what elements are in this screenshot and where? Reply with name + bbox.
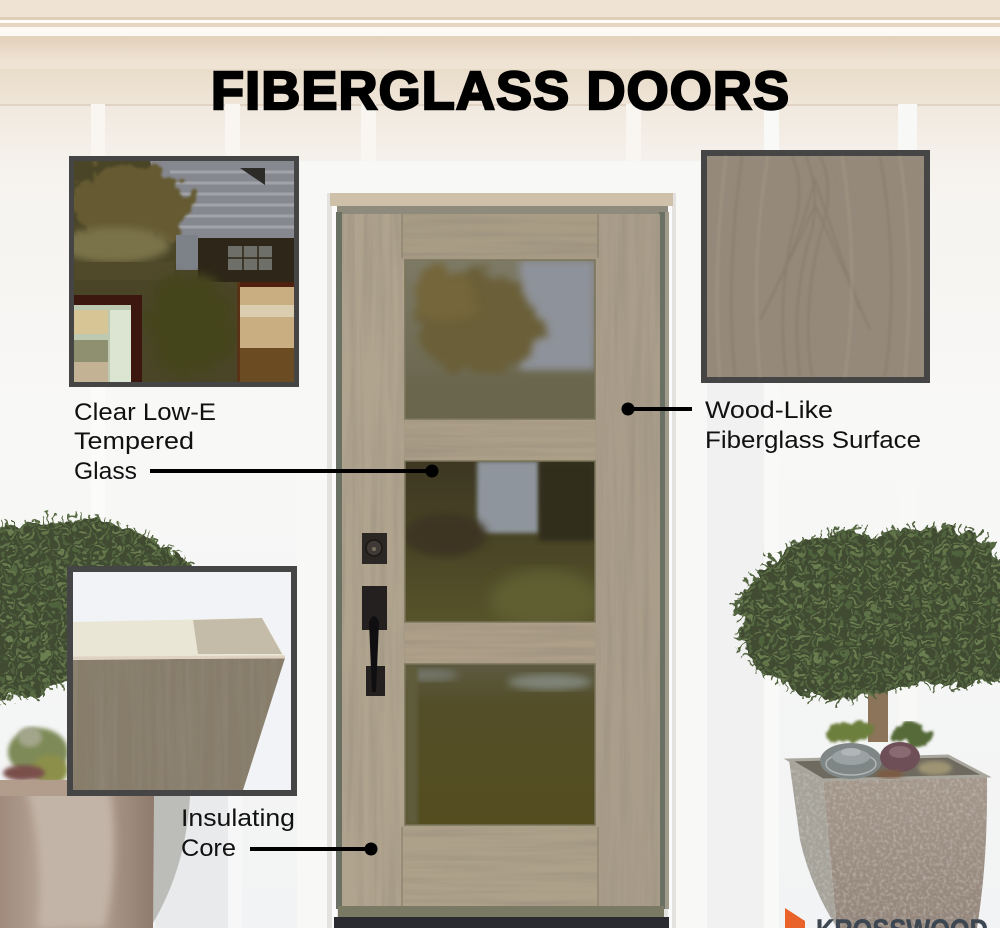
callout: insulating core: Insulating — [181, 805, 295, 832]
trunk — [868, 690, 888, 742]
left planter — [0, 780, 190, 928]
reflected roof — [150, 161, 294, 238]
inset: wood-like surface swatch — [701, 150, 930, 383]
window left — [74, 295, 142, 382]
callout: clear low-e tempered glass: Clear Low-E — [74, 399, 216, 426]
threshold — [334, 906, 669, 928]
callout: clear low-e tempered glass: Glass — [74, 458, 137, 485]
door frame — [327, 193, 676, 928]
core edge wood — [193, 618, 282, 654]
deadbolt — [362, 533, 387, 564]
foam core — [73, 618, 285, 660]
right planter — [789, 756, 987, 928]
callout: wood-like fiberglass surface: Fiberglass Surface — [705, 427, 921, 454]
glass pane: middle — [403, 461, 600, 630]
dark house — [198, 238, 294, 282]
callout: clear low-e tempered glass — [74, 399, 438, 485]
fiberglass skin — [73, 658, 285, 790]
callout: insulating core: Core — [181, 835, 236, 862]
callout: clear low-e tempered glass: Tempered — [74, 428, 194, 455]
callout: wood-like fiberglass surface: Wood-Like — [705, 397, 833, 424]
inset: insulating core cross-section — [67, 566, 297, 796]
glass pane: lower — [402, 664, 595, 825]
callout: insulating core — [181, 805, 378, 862]
foliage — [738, 527, 1000, 700]
door slab stiles and rails — [342, 214, 660, 908]
logo: krosswood — [785, 908, 988, 928]
window right — [240, 287, 294, 348]
left succulents — [3, 727, 68, 785]
title: FIBERGLASS DOORS — [211, 61, 789, 121]
right tree — [738, 527, 1000, 742]
door with frame — [327, 193, 676, 928]
left shrub — [0, 518, 190, 700]
glass edge outline — [405, 260, 595, 825]
succulent arrangement — [820, 723, 952, 779]
callout: wood-like fiberglass surface — [622, 397, 921, 454]
inset: tempered glass close-up — [60, 156, 299, 387]
reflected tree — [68, 165, 192, 245]
glass pane: upper — [405, 260, 595, 420]
door handle — [362, 586, 387, 696]
